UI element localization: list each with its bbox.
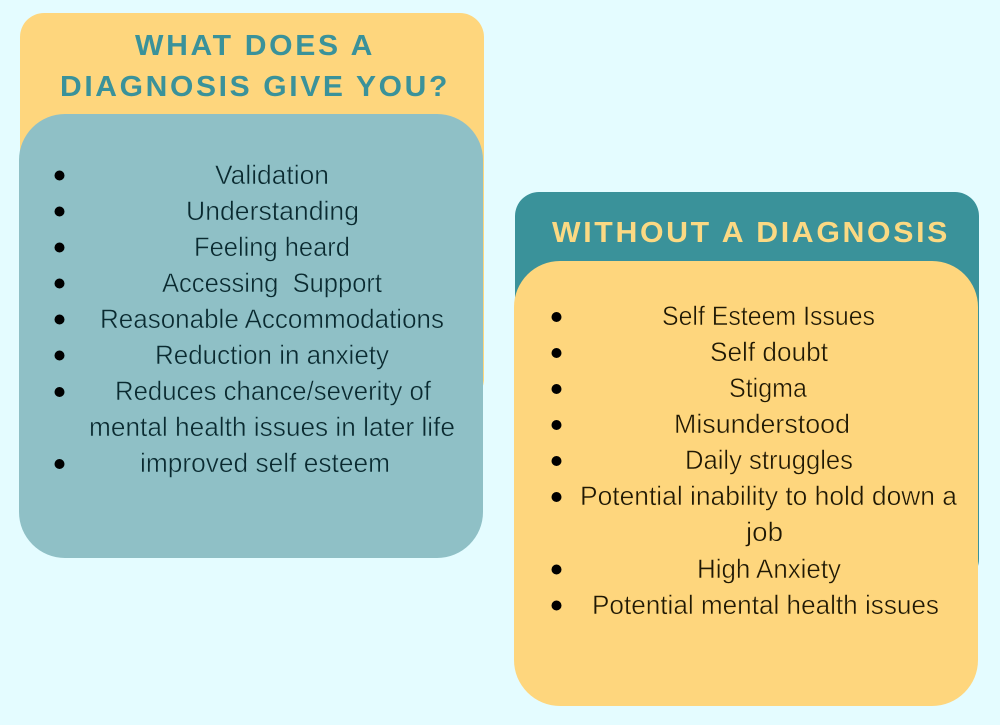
bullet markers (552, 312, 562, 610)
consequences list: Potential inability to hold down a (580, 481, 958, 511)
consequences list: Misunderstood (674, 409, 850, 439)
benefits list: Understanding (186, 196, 359, 226)
consequences list: Potential mental health issues (592, 590, 939, 620)
benefits list: Reduction in anxiety (155, 340, 389, 370)
consequences list: Self doubt (710, 337, 828, 367)
panel body background (514, 261, 978, 706)
consequences list: job (745, 517, 783, 547)
benefits list: Accessing Support (162, 268, 382, 298)
consequences list: Daily struggles (685, 445, 853, 475)
consequences list: Self Esteem Issues (662, 301, 875, 331)
heading: what does a diagnosis give you (60, 30, 450, 103)
panel: what a diagnosis gives you (19, 13, 484, 558)
benefits list: improved self esteem (140, 448, 390, 478)
benefits list: Validation (215, 160, 329, 190)
bullet markers (54, 170, 64, 469)
benefits list: Feeling heard (194, 232, 350, 262)
panel header background (20, 13, 484, 403)
heading: what does a diagnosis give you: WHAT DOES A (135, 30, 375, 62)
benefits list (89, 160, 455, 478)
panel header background (515, 192, 979, 583)
consequences list: Stigma (729, 373, 808, 403)
consequences list (580, 301, 958, 620)
benefits list: mental health issues in later life (89, 412, 455, 442)
panel body background (19, 114, 483, 558)
panel: without a diagnosis (514, 192, 979, 706)
heading: without a diagnosis: WITHOUT A DIAGNOSIS (552, 217, 950, 249)
benefits list: Reasonable Accommodations (100, 304, 444, 334)
consequences list: High Anxiety (697, 554, 841, 584)
benefits list: Reduces chance/severity of (115, 376, 431, 406)
heading: what does a diagnosis give you: DIAGNOSIS GIVE YOU? (60, 71, 450, 103)
